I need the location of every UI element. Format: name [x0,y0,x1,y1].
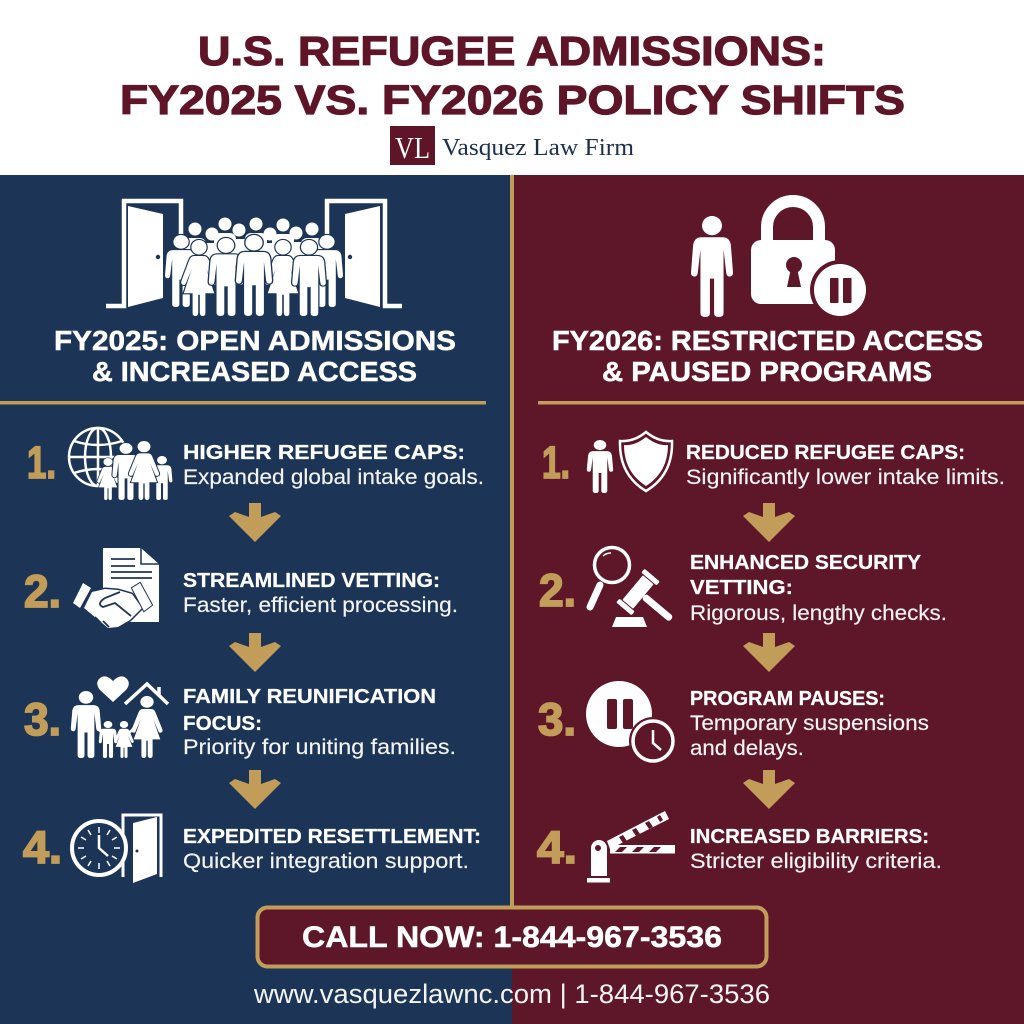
call to action button: CALL NOW: 1-844-967-3536 [302,921,722,954]
panel: FY2026 [512,175,1024,1024]
item 1: higher refugee caps: 1. [27,437,56,488]
arrow 3 [743,770,795,809]
logo: Vasquez Law Firm [390,126,634,165]
item 4: increased barriers: INCREASED BARRIERS: [690,826,929,848]
heading: FY2025 [54,325,456,387]
item 3: program pauses: Temporary suspensions [690,712,929,735]
item 3: program pauses: and delays. [690,737,804,760]
icon: magnifier and gavel [590,548,685,636]
item 2: streamlined vetting [24,548,458,628]
item 4: expedited resettlement: 4. [23,822,62,873]
item 1: higher refugee caps: HIGHER REFUGEE CAPS: [183,442,465,464]
item 2: enhanced security vetting: 2. [539,565,576,616]
item 1: reduced refugee caps [542,432,1005,493]
arrow 2 [743,633,795,672]
item 4: increased barriers: Stricter eligibility criteria. [690,850,942,873]
item 4: increased barriers [537,811,942,882]
arrow 1 [229,503,281,542]
item 2: streamlined vetting: STREAMLINED VETTING: [183,570,440,592]
icon: globe and family [69,428,172,500]
item 1: reduced refugee caps: REDUCED REFUGEE CAPS: [686,442,965,464]
icon: open doors with crowd [106,201,402,316]
item 3: family reunification: Priority for uniting families. [183,736,456,759]
item 2: enhanced security vetting [539,548,947,636]
title: U.S. REFUGEE ADMISSIONS: [198,28,826,74]
icon: document and handshake [73,548,159,628]
item 1: higher refugee caps: Expanded global intake goals. [183,466,484,489]
arrow 2 [229,633,281,672]
item 3: program pauses: PROGRAM PAUSES: [690,688,885,710]
footer contact line: www.vasquezlawnc.com | 1-844-967-3536 [253,979,770,1009]
title: FY2025 VS. FY2026 POLICY SHIFTS [120,77,905,123]
heading: FY2026: & PAUSED PROGRAMS [602,356,932,387]
heading: FY2026 [552,325,983,387]
heading: FY2025: & INCREASED ACCESS [92,356,417,387]
center divider [510,175,514,907]
logo: Vasquez Law Firm: VL [395,130,430,165]
icon: clock and door [72,815,161,883]
item 3: program pauses [538,681,929,765]
logo: Vasquez Law Firm: Vasquez Law Firm [442,135,634,161]
call to action button [258,908,766,966]
icon: family, heart and roof [71,676,168,758]
item 4: increased barriers: 4. [537,822,577,873]
icon: pause and clock [586,681,677,765]
icon: person, padlock and pause [691,201,870,320]
item 1: higher refugee caps [27,428,484,500]
item 3: program pauses: 3. [538,694,576,745]
item 1: reduced refugee caps: Significantly lower intake limits. [686,466,1005,489]
icon: person and shield [587,432,672,493]
title [120,28,905,123]
item 4: expedited resettlement: EXPEDITED RESETTLEMENT: [183,826,481,848]
item 3: family reunification: FAMILY REUNIFICATION [183,686,436,708]
arrow 1 [743,503,795,542]
item 4: expedited resettlement [23,815,481,883]
item 2: streamlined vetting: Faster, efficient processing. [183,594,458,617]
item 1: reduced refugee caps: 1. [542,437,570,488]
header background [0,0,1024,175]
item 2: enhanced security vetting: VETTING: [690,577,793,599]
item 3: family reunification: 3. [24,694,61,745]
item 4: expedited resettlement: Quicker integration support. [183,850,469,873]
heading: FY2025: FY2025: OPEN ADMISSIONS [54,325,456,356]
panel: FY2025 [0,175,512,1024]
item 2: streamlined vetting: 2. [24,566,61,617]
item 2: enhanced security vetting: Rigorous, lengthy checks. [690,602,947,625]
item 2: enhanced security vetting: ENHANCED SECURITY [690,552,922,574]
arrow 3 [229,770,281,809]
icon: boom barrier [587,811,675,882]
heading: FY2026: FY2026: RESTRICTED ACCESS [552,325,983,356]
item 3: family reunification [24,676,456,759]
item 3: family reunification: FOCUS: [183,713,262,735]
